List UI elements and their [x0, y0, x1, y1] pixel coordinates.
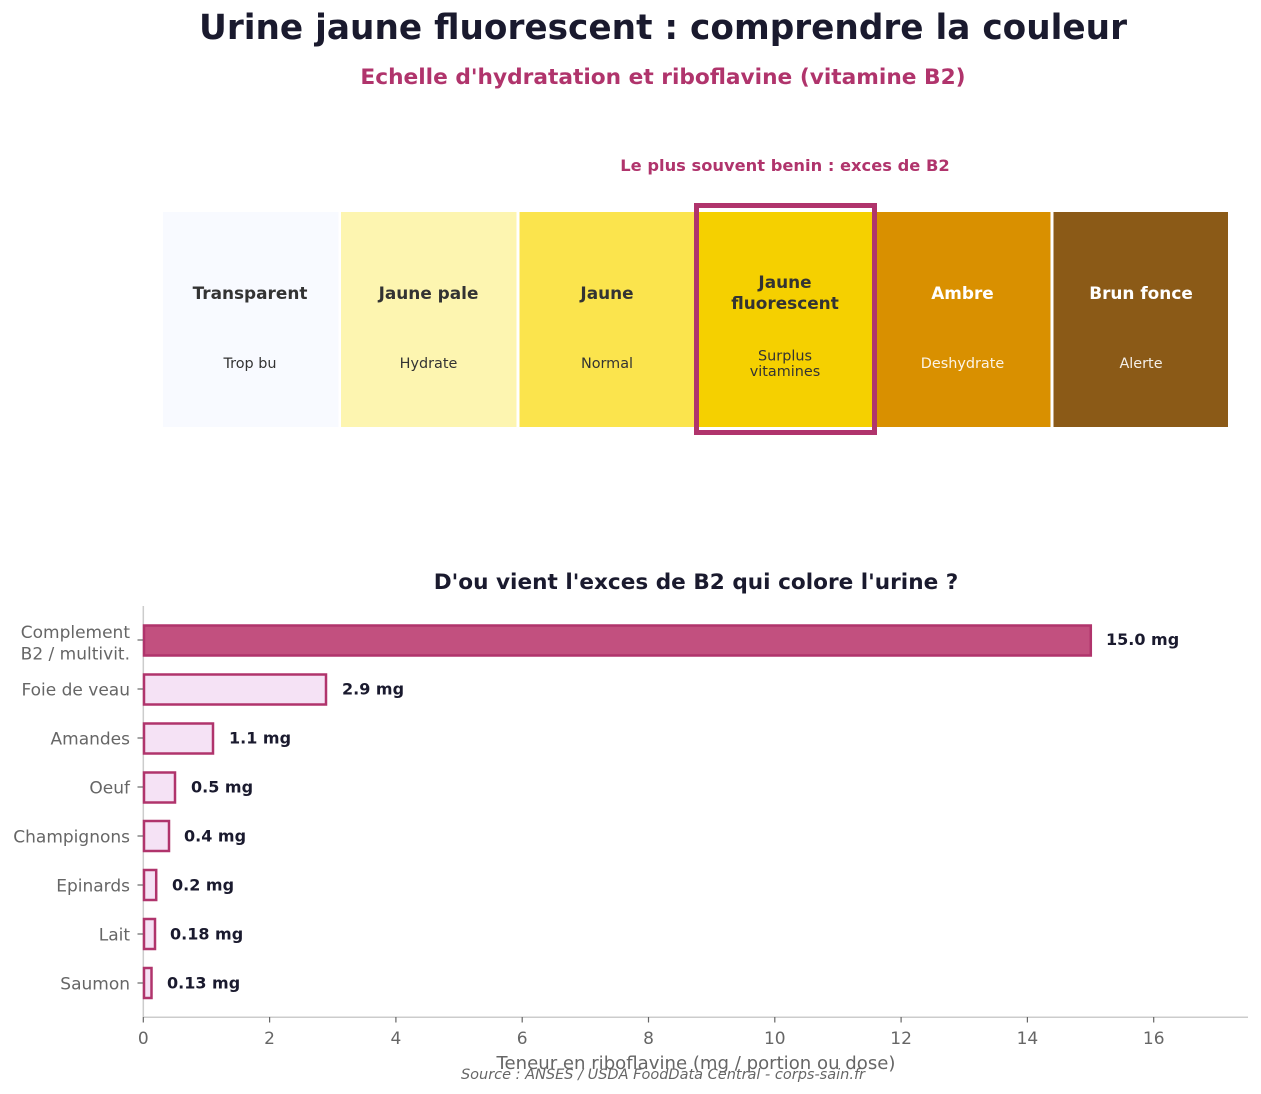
- segment: dark brown: Brun fonce: [1089, 283, 1193, 303]
- segment: dark brown: [1054, 212, 1228, 427]
- segment: fluorescent yellow, highlighted: Surplus: [758, 348, 812, 364]
- x axis ticks and labels: 6: [517, 1029, 528, 1049]
- bar: epinards: [56, 870, 234, 900]
- source note: Source : ANSES / USDA FoodData Central - corps-sain.fr: [461, 1067, 866, 1083]
- chart title: D'ou vient l'exces de B2 qui colore l'urine ?: [434, 570, 958, 595]
- bar: foie de veau: 2.9 mg: [342, 680, 404, 698]
- bar: lait: Lait: [99, 926, 130, 946]
- x axis ticks and labels: 4: [390, 1029, 401, 1049]
- x axis title: Teneur en riboflavine (mg / portion ou dose): [496, 1053, 895, 1074]
- bar: complement: 15.0 mg: [1106, 630, 1179, 649]
- bar: oeuf: [89, 772, 253, 802]
- segment: fluorescent yellow, highlighted: Jaune: [757, 272, 812, 292]
- axes: [143, 606, 1248, 1017]
- bar: complement: B2 / multivit.: [21, 644, 130, 664]
- bar: complement: [21, 623, 1179, 664]
- x axis ticks and labels: 16: [1143, 1029, 1165, 1049]
- segment: yellow: Jaune: [579, 283, 634, 303]
- bar: amandes: 1.1 mg: [229, 728, 291, 748]
- bar: champignons: Champignons: [13, 828, 130, 848]
- segment: transparent: Trop bu: [222, 356, 277, 372]
- bar: epinards: 0.2 mg: [172, 876, 234, 894]
- x axis ticks and labels: 14: [1017, 1029, 1038, 1049]
- segment: fluorescent yellow, highlighted: fluorescent: [731, 293, 839, 313]
- x axis ticks and labels: 12: [890, 1029, 912, 1049]
- bar: oeuf: 0.5 mg: [191, 778, 253, 796]
- x axis ticks and labels: 0: [138, 1029, 149, 1049]
- x axis ticks and labels: 10: [764, 1029, 786, 1049]
- x axis ticks and labels: 8: [643, 1029, 654, 1049]
- panel: colour scale: [163, 206, 1228, 432]
- bar: saumon: Saumon: [60, 974, 130, 994]
- bar chart: riboflavin content: [13, 606, 1248, 1074]
- bar: foie de veau: [21, 674, 404, 704]
- segment: fluorescent yellow, highlighted: vitamines: [750, 364, 820, 380]
- segment: pale yellow: Jaune pale: [378, 283, 478, 303]
- bar: saumon: 0.13 mg: [167, 974, 240, 992]
- segment: pale yellow: Hydrate: [400, 356, 457, 372]
- segment: pale yellow: [341, 212, 516, 427]
- bar: amandes: Amandes: [50, 730, 130, 750]
- segment: transparent: [163, 212, 338, 427]
- bar: oeuf: Oeuf: [89, 778, 131, 798]
- x axis ticks and labels: [138, 1017, 1165, 1049]
- bar: amandes: [50, 724, 291, 754]
- bar: complement: Complement: [21, 623, 130, 643]
- callout: benign note: Le plus souvent benin : exces de B2: [620, 156, 950, 175]
- segment: amber: Ambre: [931, 283, 994, 303]
- segment: amber: [875, 212, 1050, 427]
- segment: fluorescent yellow, highlighted: [696, 206, 874, 432]
- bar: foie de veau: Foie de veau: [21, 680, 130, 700]
- bar: lait: 0.18 mg: [170, 924, 243, 944]
- bar: saumon: [60, 968, 240, 998]
- segment: yellow: Normal: [581, 356, 633, 372]
- title: Urine jaune fluorescent : comprendre la couleur: [199, 8, 1127, 48]
- segment: transparent: Transparent: [193, 283, 307, 303]
- x axis ticks and labels: 2: [264, 1029, 275, 1049]
- bar: lait: [99, 919, 243, 949]
- bar: champignons: 0.4 mg: [184, 826, 246, 846]
- bar: champignons: [13, 821, 246, 851]
- subtitle: Echelle d'hydratation et riboflavine (vitamine B2): [360, 65, 966, 90]
- bar: epinards: Epinards: [56, 876, 130, 896]
- segment: yellow: [520, 212, 696, 427]
- segment: amber: Deshydrate: [921, 356, 1004, 372]
- segment: dark brown: Alerte: [1119, 356, 1163, 372]
